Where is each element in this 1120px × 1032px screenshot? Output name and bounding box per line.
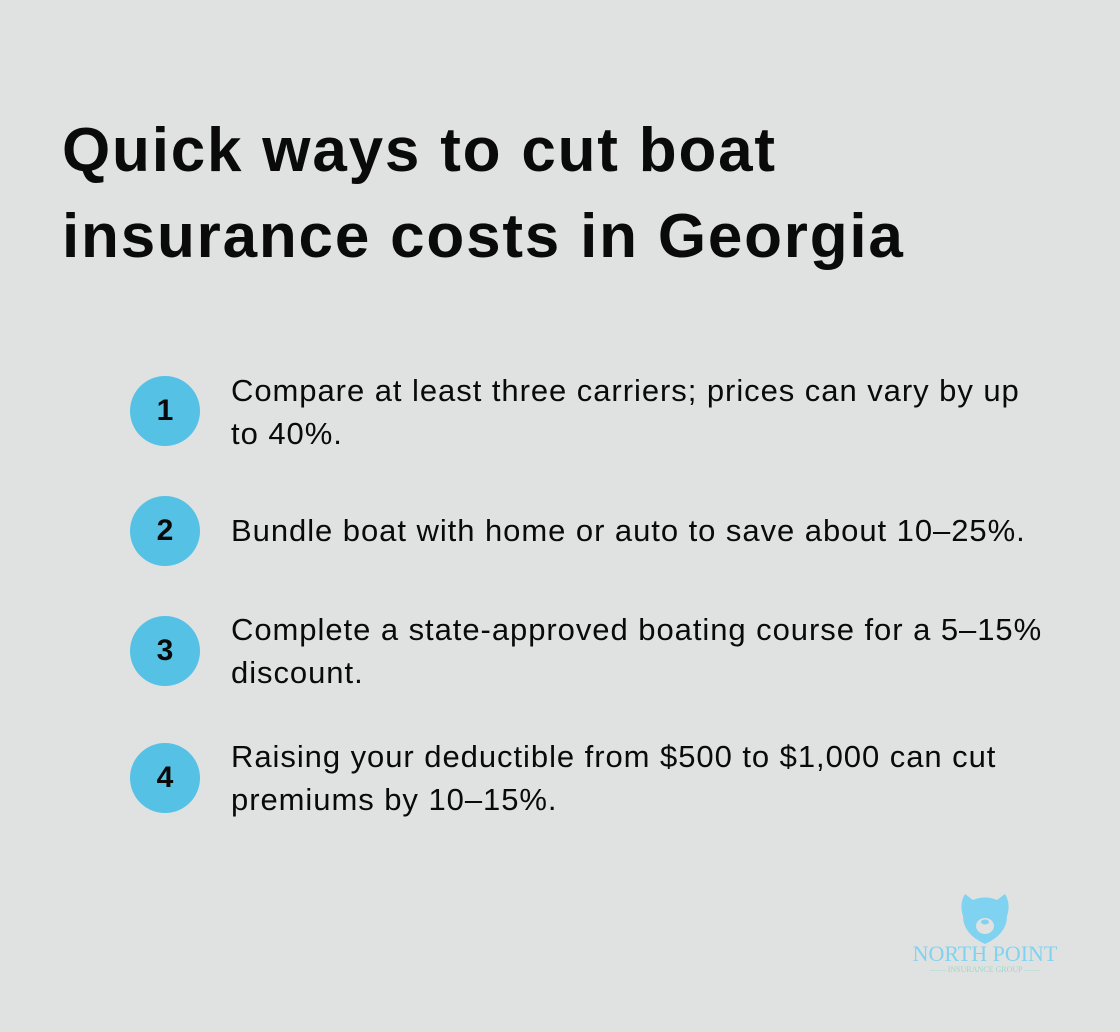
icon: bear xyxy=(961,894,1009,944)
item 3 text: Complete a state-approved boating course for a 5–15% xyxy=(231,612,1042,647)
item 1 text: to 40%. xyxy=(231,416,343,451)
item 2 text: Bundle boat with home or auto to save about 10–25%. xyxy=(231,513,1026,548)
item 3 text: discount. xyxy=(231,655,364,690)
item 2 badge xyxy=(130,496,200,566)
item 1 badge xyxy=(130,376,200,446)
item 4 text xyxy=(231,739,996,817)
item 3 text xyxy=(231,612,1042,690)
item 1 badge: 1 xyxy=(157,394,173,427)
item 4 badge xyxy=(130,743,200,813)
item 4 badge: 4 xyxy=(157,761,173,794)
logo text: NORTH POINT xyxy=(913,941,1057,966)
item 3 badge: 3 xyxy=(157,634,173,667)
item 4 text: Raising your deductible from $500 to $1,000 can cut xyxy=(231,739,996,774)
item 1 text xyxy=(231,373,1020,451)
item 4 text: premiums by 10–15%. xyxy=(231,782,557,817)
logo: —— INSURANCE GROUP —— xyxy=(930,965,1040,974)
title: Quick ways to cut boat xyxy=(62,116,777,185)
item 2 badge: 2 xyxy=(157,514,173,547)
item 1 text: Compare at least three carriers; prices can vary by up xyxy=(231,373,1020,408)
title: insurance costs in Georgia xyxy=(62,202,905,271)
title xyxy=(62,116,905,271)
item 3 badge xyxy=(130,616,200,686)
logo xyxy=(913,894,1057,974)
